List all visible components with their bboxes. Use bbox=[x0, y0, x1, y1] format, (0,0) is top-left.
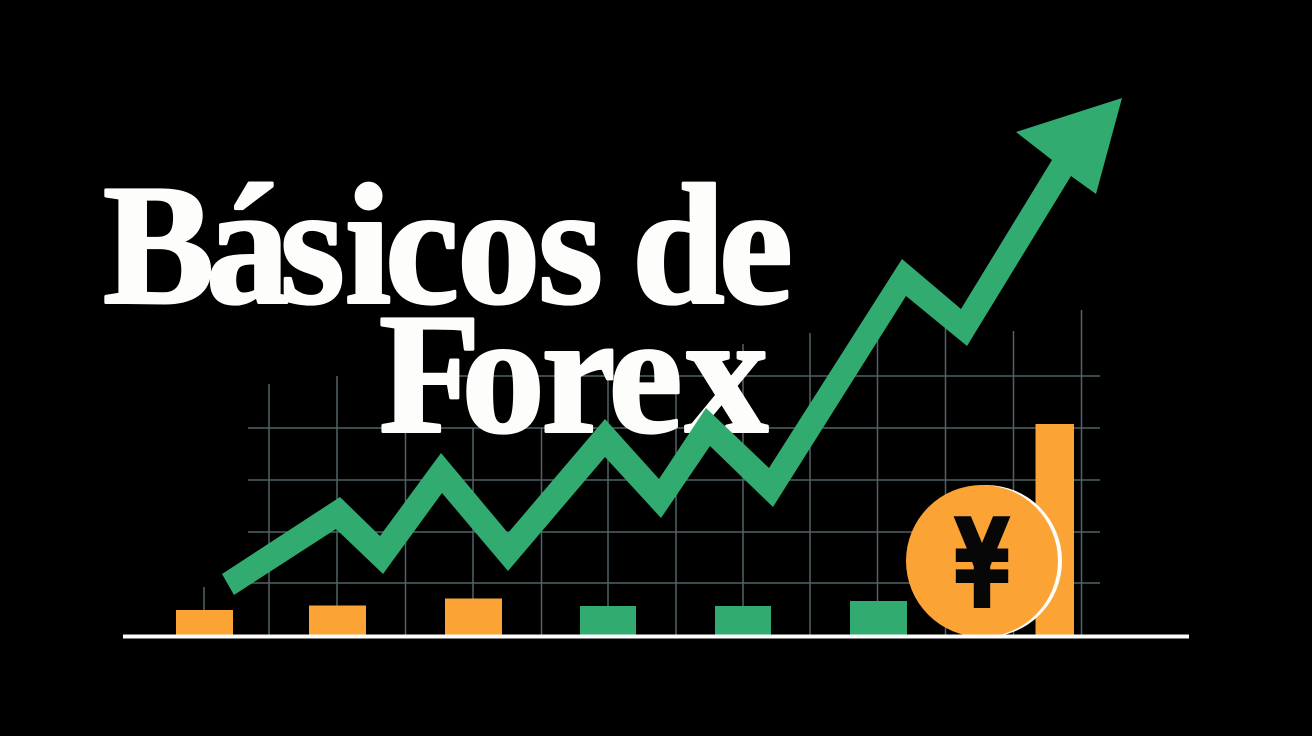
title bbox=[103, 149, 793, 469]
icon: yen coin: ¥ bbox=[954, 493, 1010, 637]
tall orange bar bbox=[1036, 424, 1074, 635]
baseline bbox=[123, 634, 1189, 638]
title: Forex bbox=[379, 278, 768, 469]
chart grid bbox=[204, 310, 1100, 635]
icon: yen coin bbox=[906, 485, 1062, 637]
title: Básicos de bbox=[103, 149, 793, 340]
rising green trend arrow bbox=[222, 98, 1122, 595]
small bars bbox=[176, 598, 907, 635]
